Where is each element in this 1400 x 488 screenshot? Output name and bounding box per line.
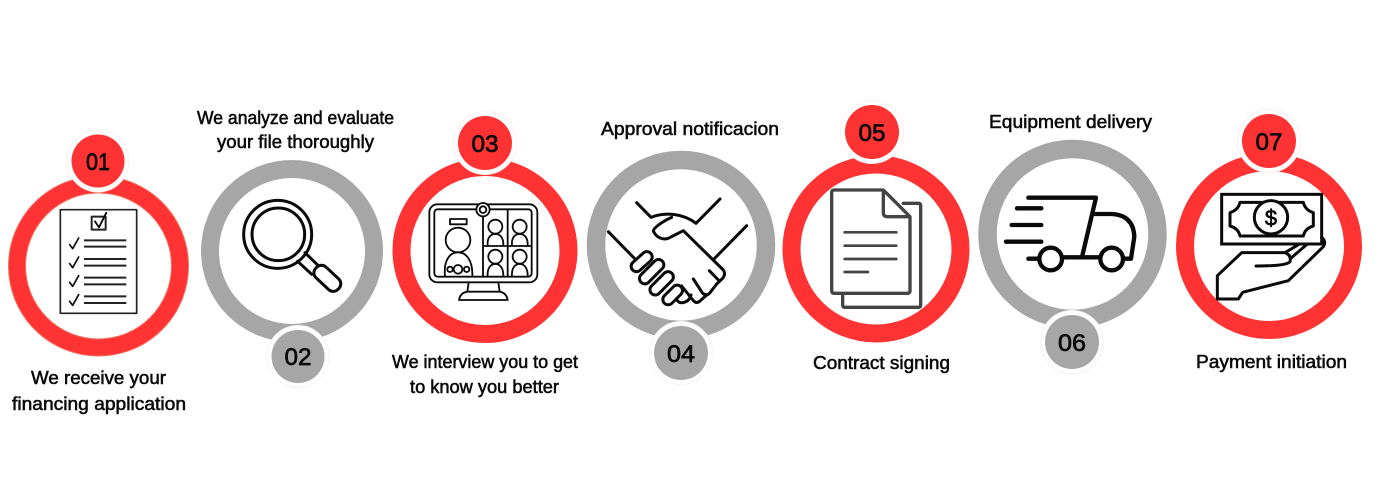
badge 01 bbox=[67, 130, 129, 192]
label 01 bbox=[12, 368, 186, 414]
label 06: Equipment delivery bbox=[989, 112, 1152, 132]
step 04 bbox=[596, 119, 779, 384]
label 05: Contract signing bbox=[813, 353, 950, 373]
label 07: Payment initiation bbox=[1196, 352, 1347, 372]
ring 06 bbox=[988, 149, 1158, 319]
ring 01 bbox=[17, 184, 180, 348]
label 01: financing application bbox=[12, 394, 186, 414]
badge 03: 03 bbox=[472, 131, 498, 158]
icon: documents bbox=[832, 190, 921, 307]
icon: magnifying glass bbox=[244, 200, 344, 294]
badge 07: 07 bbox=[1256, 129, 1282, 156]
ring 04 bbox=[596, 160, 766, 330]
badge 05: 05 bbox=[858, 120, 886, 147]
badge 04 bbox=[650, 322, 712, 384]
label 03 bbox=[392, 352, 578, 397]
step 02 bbox=[197, 108, 394, 388]
icon: checklist bbox=[60, 210, 137, 313]
step 05 bbox=[792, 100, 960, 373]
icon: video call monitor bbox=[429, 203, 537, 300]
badge 07 bbox=[1238, 110, 1300, 172]
step 07 bbox=[1185, 110, 1353, 372]
icon: hand holding banknote: $ bbox=[1265, 205, 1277, 230]
label 01: We receive your bbox=[31, 368, 166, 388]
icon: delivery truck bbox=[1006, 198, 1134, 270]
badge 02 bbox=[267, 326, 329, 388]
badge 03 bbox=[454, 112, 516, 174]
step 01 bbox=[12, 130, 186, 414]
icon: hand holding banknote bbox=[1217, 194, 1325, 299]
badge 01: 01 bbox=[86, 149, 110, 176]
label 02: We analyze and evaluate bbox=[197, 108, 394, 128]
label 02: your file thoroughly bbox=[217, 132, 374, 152]
label 04: Approval notificacion bbox=[601, 119, 779, 139]
badge 06 bbox=[1040, 310, 1104, 374]
label 03: to know you better bbox=[410, 377, 559, 397]
step 03 bbox=[392, 112, 578, 397]
ring 07 bbox=[1185, 162, 1353, 330]
ring 03 bbox=[402, 167, 568, 334]
badge 05 bbox=[840, 100, 904, 164]
badge 04: 04 bbox=[667, 341, 695, 368]
icon: handshake bbox=[608, 199, 747, 307]
ring 05 bbox=[792, 164, 960, 334]
label 02 bbox=[197, 108, 394, 152]
badge 06: 06 bbox=[1058, 330, 1086, 357]
badge 02: 02 bbox=[284, 344, 312, 371]
step 06 bbox=[988, 112, 1158, 374]
label 03: We interview you to get bbox=[392, 352, 578, 372]
ring 02 bbox=[210, 169, 374, 333]
